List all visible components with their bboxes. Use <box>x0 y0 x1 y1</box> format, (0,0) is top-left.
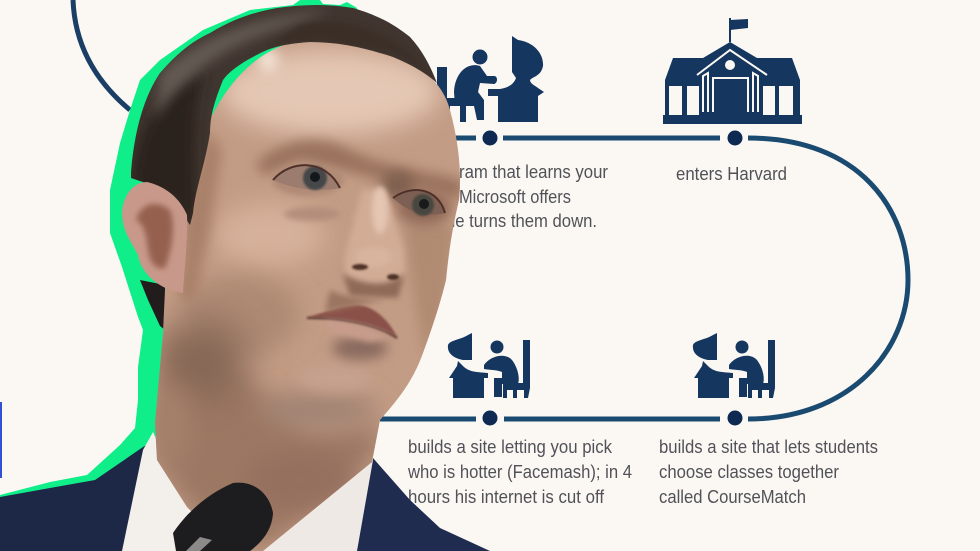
face and neck <box>155 42 460 551</box>
neck <box>155 330 385 551</box>
right side shading <box>405 225 455 360</box>
right eye <box>393 190 445 216</box>
chin highlight <box>308 372 360 394</box>
timeline path <box>73 0 908 419</box>
shadow below lip <box>332 336 388 360</box>
text: program caption: ram that learns your <box>459 162 608 182</box>
green cutout outline <box>0 0 357 500</box>
icon: programmer at computer <box>437 36 544 122</box>
left edge blue sliver <box>0 402 2 478</box>
brow band <box>255 140 462 200</box>
icon: student at computer 1 <box>448 333 530 398</box>
nose shading <box>345 190 405 290</box>
text: Facemash caption: who is hotter (Facemash); in 4 <box>407 462 632 482</box>
text: Facemash caption: builds a site letting you pick <box>408 437 613 457</box>
forehead highlight <box>220 50 440 134</box>
text: Facemash caption: hours his internet is cut off <box>408 487 605 507</box>
temple shadow <box>180 130 222 300</box>
text: program caption: Microsoft offers <box>459 187 571 207</box>
left eye bag <box>284 207 340 221</box>
text: CourseMatch caption: called CourseMatch <box>659 487 806 507</box>
microphone <box>173 483 273 551</box>
timeline dots <box>482 130 742 426</box>
portrait <box>0 0 490 551</box>
hair <box>131 5 437 225</box>
text: program caption: he turns them down. <box>446 211 597 231</box>
right eye socket <box>396 190 452 226</box>
text: Facemash caption <box>407 437 632 507</box>
text: CourseMatch caption: choose classes together <box>659 462 839 482</box>
left eye <box>273 165 340 190</box>
icon: school building <box>663 18 802 124</box>
icon: student at computer 2 <box>693 333 775 398</box>
cheek highlight <box>215 203 325 267</box>
text: program caption <box>446 162 608 231</box>
nostrils <box>352 264 399 280</box>
hair behind ear <box>140 280 165 330</box>
dark side of nose bridge <box>380 171 416 201</box>
mouth <box>307 290 397 342</box>
left eye socket <box>272 171 344 196</box>
ear <box>122 182 187 293</box>
jaw underside <box>258 392 378 428</box>
shirt <box>122 432 373 551</box>
suit <box>0 440 490 551</box>
text: enters Harvard: enters Harvard <box>676 164 787 184</box>
text: CourseMatch caption <box>659 437 878 507</box>
text: CourseMatch caption: builds a site that lets students <box>659 437 878 457</box>
